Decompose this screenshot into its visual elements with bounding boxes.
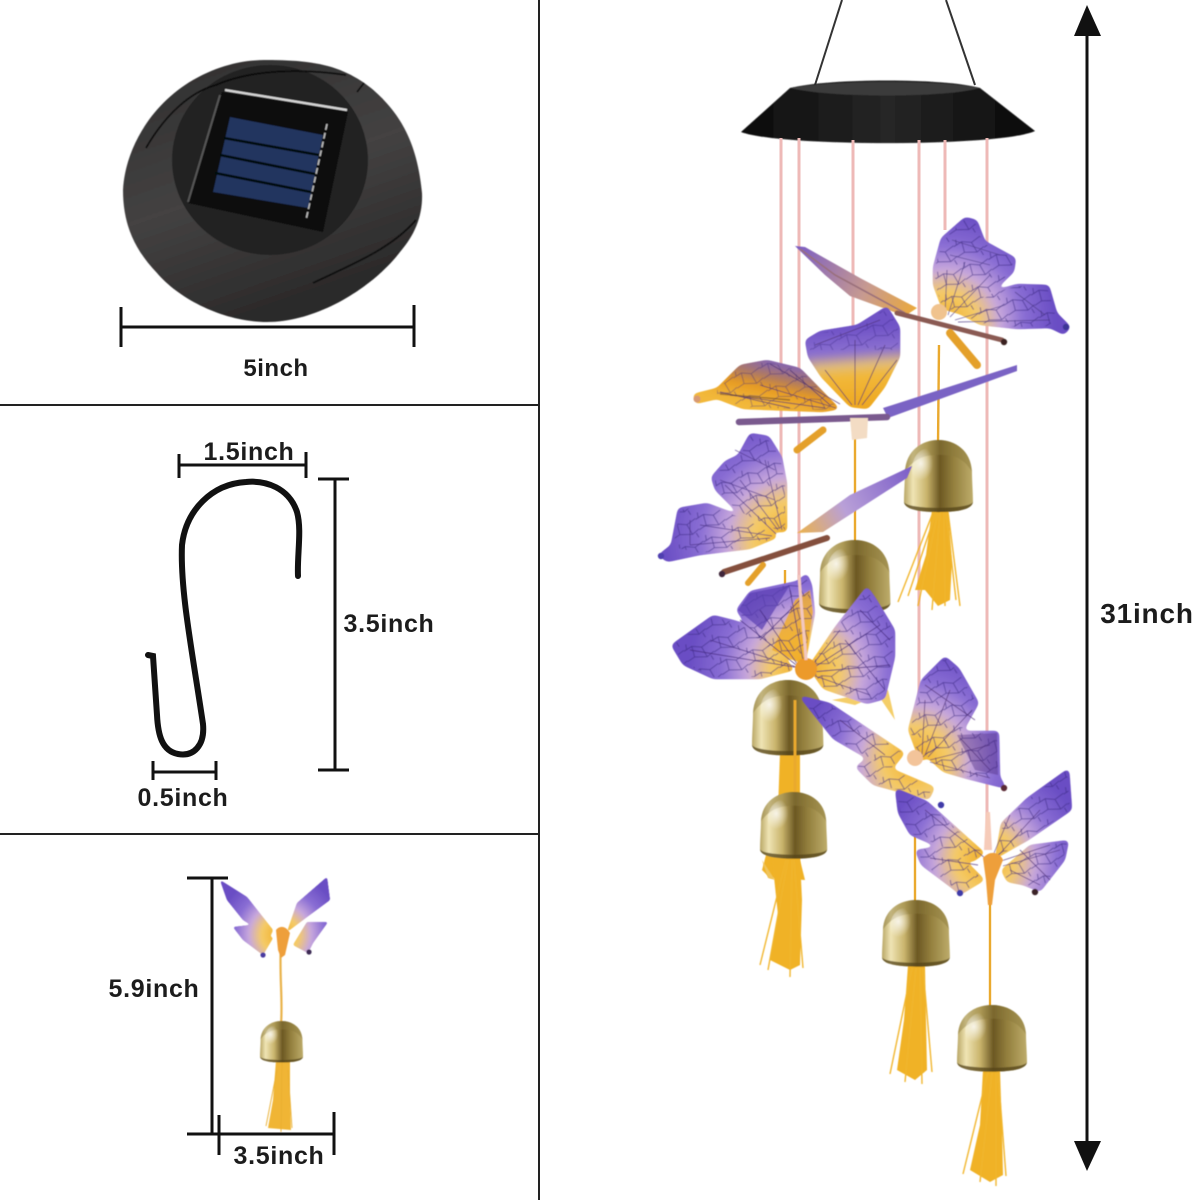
butterfly 4: [671, 573, 895, 720]
bell 4: [819, 540, 890, 613]
dimension: hook opening: [153, 761, 216, 780]
tassel and bell 1: [752, 680, 823, 880]
panel dividers: [0, 0, 539, 1200]
butterfly 3: [658, 433, 912, 583]
dimension: pendant width: [219, 1112, 334, 1155]
dimension: 5 inch: [121, 305, 414, 347]
label: 5.9inch: 5.9inch: [108, 975, 200, 1003]
dimension: pendant height: [187, 878, 235, 1134]
butterfly 1: [795, 217, 1071, 365]
panel: full wind chime: [658, 0, 1072, 1186]
panel: single pendant dimensions: [108, 877, 334, 1170]
butterfly 2: [693, 306, 1017, 450]
label: 0.5inch: 0.5inch: [137, 784, 229, 812]
label: 3.5inch pendant width: 3.5inch: [233, 1142, 325, 1170]
icon: solar lid: [123, 60, 422, 322]
panel: solar lid diameter: [121, 60, 422, 382]
bell and tassel 3: [898, 440, 973, 610]
solar cap: [741, 80, 1035, 143]
label: 3.5inch hook height: 3.5inch: [343, 610, 435, 638]
illustration: single butterfly with bell: [220, 877, 330, 1132]
yellow strings: [785, 345, 990, 1010]
dimension arrow: total height: [1074, 5, 1101, 1171]
hanging wires: [815, 0, 975, 85]
label: 31inch: 31inch: [1100, 598, 1194, 629]
label: 1.5inch: 1.5inch: [203, 438, 295, 466]
panel: hook dimensions: [137, 438, 435, 812]
bell and tassel 2: [760, 700, 827, 977]
butterfly 6: [895, 768, 1072, 905]
dimension: hook width: [179, 452, 306, 478]
butterfly 5: [798, 656, 1007, 808]
bell and tassel 5: [882, 900, 950, 1084]
label: 5inch: 5inch: [243, 355, 309, 382]
icon: S hook: [148, 482, 299, 754]
bell and tassel 6: [957, 1005, 1027, 1186]
pink cords: [781, 138, 987, 830]
dimension: hook height: [318, 479, 349, 770]
